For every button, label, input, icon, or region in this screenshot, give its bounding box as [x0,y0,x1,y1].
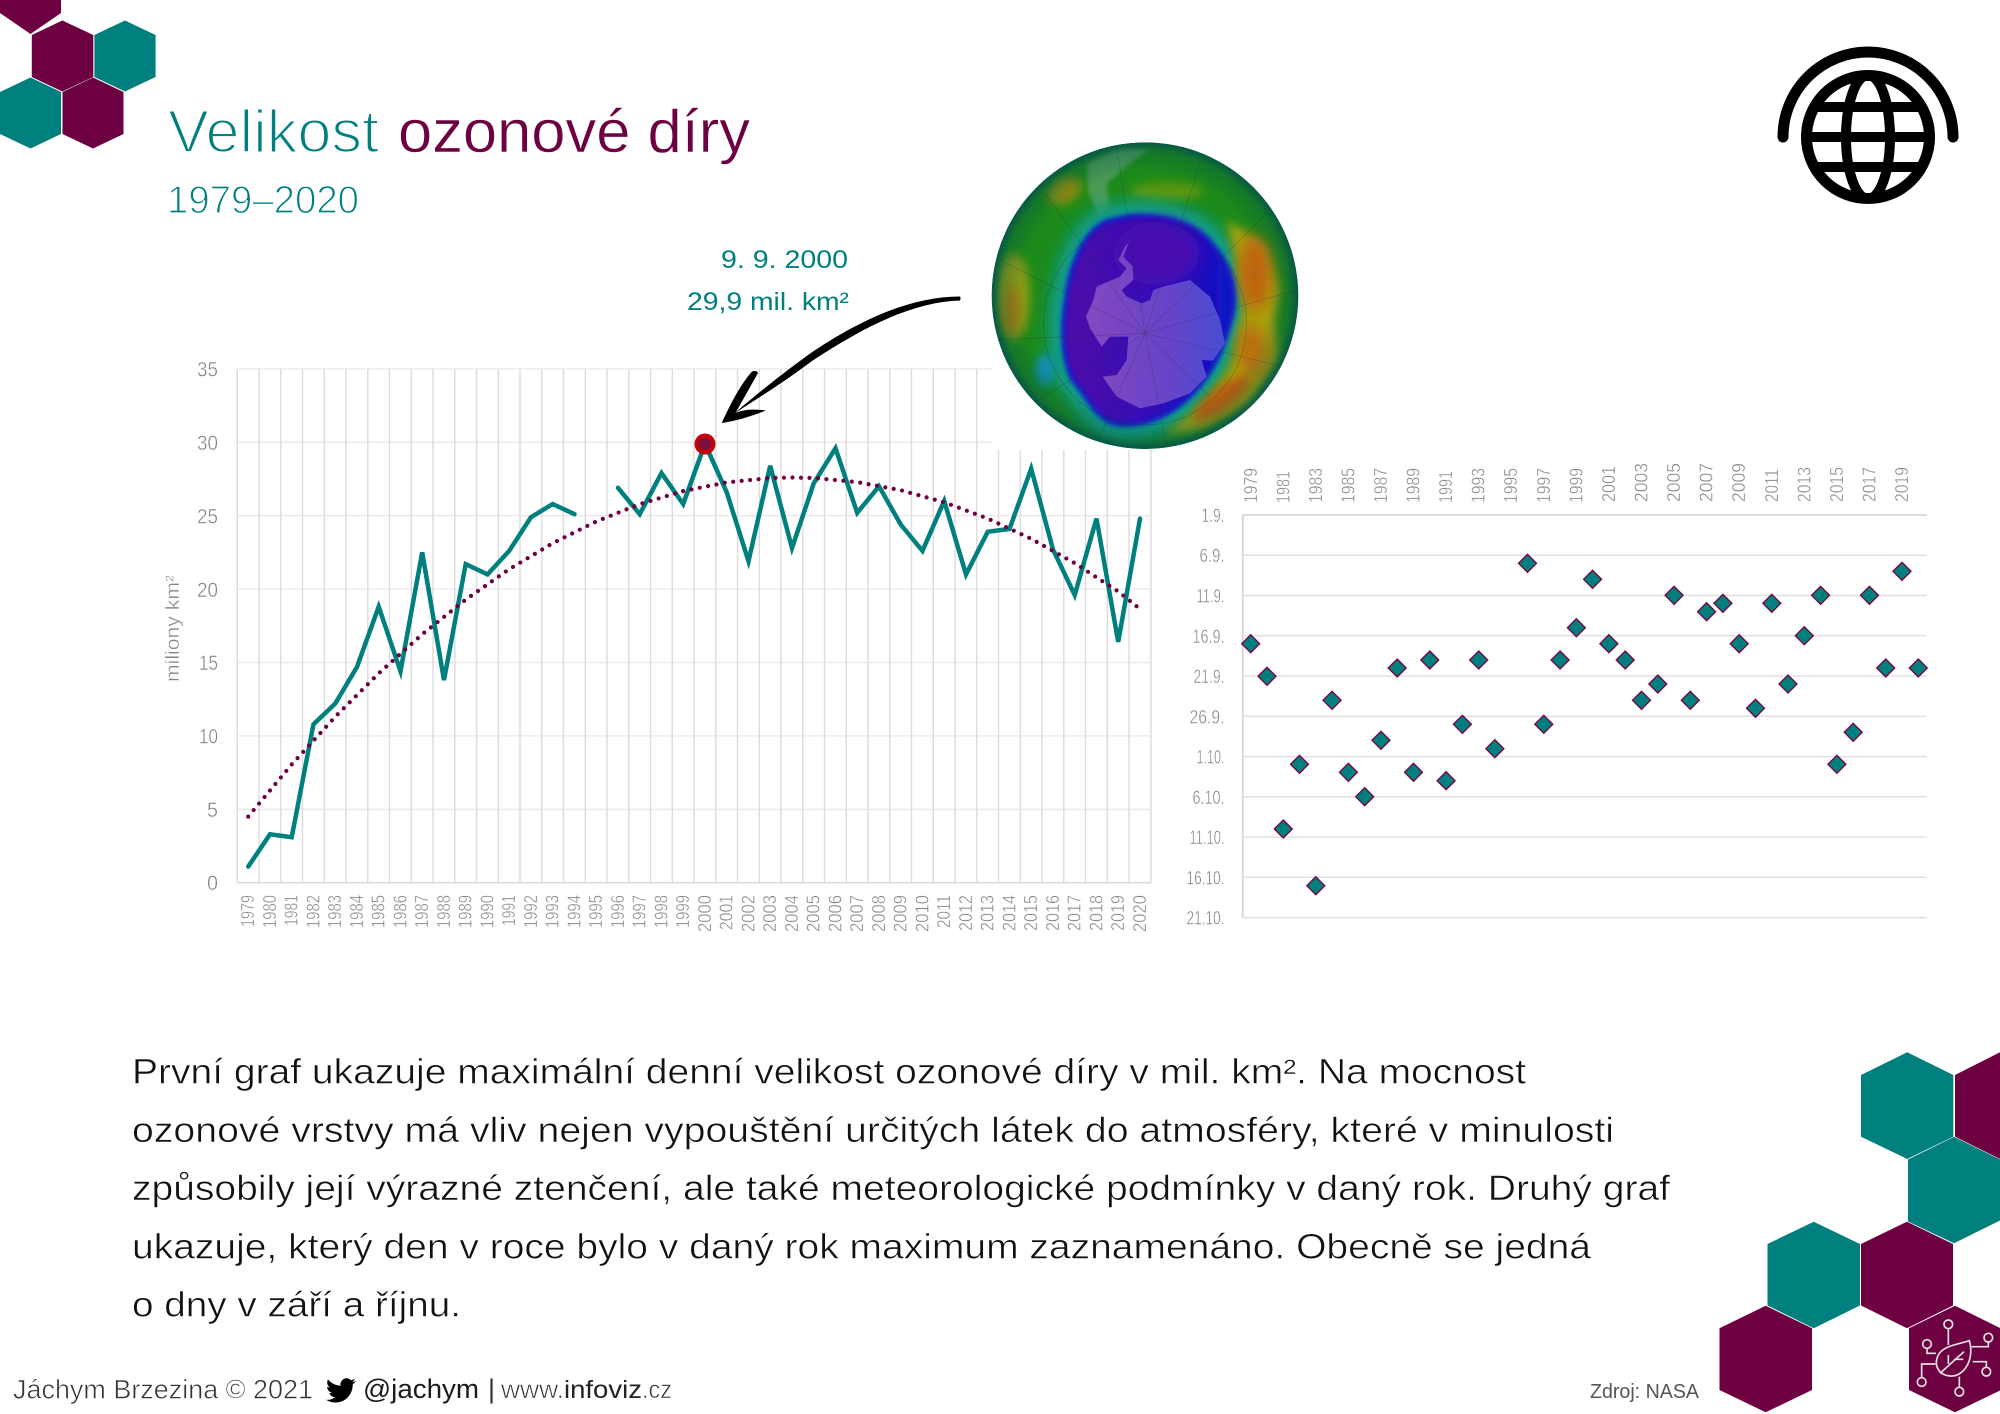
x axis year labels chart 2: 1989 [1404,468,1424,503]
x axis year labels chart 2: 1981 [1273,471,1293,503]
x axis year labels chart 2: 1995 [1501,468,1521,503]
x axis year labels chart 2 [1241,463,1912,503]
footer credit: Jáchym Brzezina © 2021 [13,1374,313,1404]
footer credit: infoviz [564,1376,642,1404]
hexagon cluster top left [0,0,156,148]
x axis year labels chart 1: 1999 [673,895,693,928]
y axis labels chart 1: 35 [197,358,218,382]
scatter chart: date of yearly maximum [1186,463,1927,930]
x axis year labels chart 2: 1999 [1566,468,1586,503]
x axis year labels chart 1: 2009 [891,895,911,932]
x axis year labels chart 1: 1996 [608,895,628,928]
grid lines chart 1 [237,369,1151,883]
globe icon top right [1783,52,1953,199]
x axis year labels chart 1: 2020 [1130,895,1150,932]
x axis year labels chart 1: 1979 [238,895,258,927]
explanatory paragraph: způsobily její výrazné ztenčení, ale také meteorologické podmínky v daný rok. Druhý graf [132,1169,1670,1208]
x axis year labels chart 2: 2013 [1794,467,1814,502]
y axis date labels: 6.10. [1192,788,1224,809]
x axis year labels chart 1: 2015 [1021,895,1041,931]
x axis year labels chart 1: 2007 [847,895,867,932]
x axis year labels chart 2: 1991 [1436,471,1456,503]
explanatory paragraph [132,1052,1670,1325]
x axis year labels chart 1: 2008 [869,895,889,932]
x axis year labels chart 1: 1991 [499,895,519,926]
y axis labels chart 1: 25 [197,506,218,528]
hexagon cluster bottom right [1720,1052,2000,1412]
x axis year labels chart 1: 2019 [1108,895,1128,931]
ozone hole globe image [992,142,1298,449]
x axis year labels chart 1: 1987 [412,895,432,928]
x axis year labels chart 1: 2006 [826,895,846,932]
x axis year labels chart 2: 2009 [1729,463,1749,502]
x axis year labels chart 1: 1981 [282,895,302,926]
title [168,98,750,165]
y axis labels chart 1: 30 [197,432,218,455]
y axis date labels: 16.9. [1192,627,1224,648]
x axis year labels chart 1: 2014 [1000,895,1020,931]
x axis year labels chart 2: 1983 [1306,468,1326,503]
teal data line [248,444,1140,867]
footer credit: www. [500,1376,564,1404]
x axis year labels chart 1: 1984 [347,895,367,928]
explanatory paragraph: ukazuje, který den v roce bylo v daný rok maximum zaznamenáno. Obecně se jedná [132,1227,1592,1266]
icon: leaf with circuit nodes [1917,1320,1993,1396]
callout: date and area of maximum: 9. 9. 2000 [721,246,848,274]
x axis year labels chart 1: 1983 [325,895,345,928]
y axis labels chart 1: 10 [199,726,218,748]
x axis year labels chart 1: 2010 [912,895,932,932]
x axis year labels chart 2: 2007 [1697,463,1717,502]
y axis labels chart 1: 20 [197,579,218,602]
title: Velikost [168,98,379,165]
y axis labels chart 1: 0 [207,872,218,895]
source note: Zdroj: NASA [1590,1381,1700,1403]
x axis year labels chart 2: 1985 [1338,468,1358,503]
x axis year labels chart 2: 1987 [1371,468,1391,503]
diamond markers [1242,554,1927,895]
Antarctica [1086,235,1225,408]
y axis date labels: 21.9. [1194,667,1224,688]
line chart: maximum daily ozone hole size [163,358,1151,932]
y axis date labels: 26.9. [1190,707,1224,728]
y axis labels chart 1 [197,358,218,895]
x axis year labels chart 1: 1998 [652,895,672,928]
explanatory paragraph: První graf ukazuje maximální denní velikost ozonové díry v mil. km². Na mocnost [132,1052,1526,1092]
x axis year labels chart 2: 1993 [1469,468,1489,503]
x axis year labels chart 1: 2017 [1065,895,1085,931]
icon: twitter bird [326,1378,356,1402]
x axis year labels chart 1: 2001 [717,895,737,930]
x axis year labels chart 1: 1997 [630,895,650,928]
x axis year labels chart 1: 2002 [738,895,758,932]
y axis date labels [1186,506,1224,930]
x axis year labels chart 1: 1989 [456,895,476,928]
arrow from globe to maximum [722,296,960,423]
x axis year labels chart 1: 2003 [760,895,780,932]
x axis year labels chart 1: 1980 [260,895,280,928]
cyan halo around hole [1064,216,1233,424]
y axis date labels: 1.9. [1202,506,1224,527]
x axis year labels chart 1: 1992 [521,895,541,928]
white image background behind globe [992,140,1302,450]
dotted trend line [248,478,1140,817]
y axis date labels: 6.9. [1200,546,1224,567]
x axis year labels chart 1: 2011 [934,895,954,928]
x axis year labels chart 2: 2019 [1892,467,1912,502]
x axis year labels chart 2: 2015 [1827,467,1847,502]
subtitle: 1979–2020 [167,179,359,222]
y axis date labels: 1.10. [1196,748,1224,769]
x axis year labels chart 2: 1997 [1534,468,1554,503]
y axis date labels: 11.10. [1190,828,1224,849]
x axis year labels chart 2: 1979 [1241,468,1261,503]
y axis labels chart 1: 15 [199,652,218,675]
y axis date labels: 11.9. [1196,586,1224,608]
x axis year labels chart 2: 2005 [1664,463,1684,502]
x axis year labels chart 2: 2011 [1762,469,1782,502]
meridians [993,147,1297,447]
highlighted maximum point 2000 [694,434,716,454]
x axis year labels chart 1 [238,895,1150,932]
x axis year labels chart 1: 2000 [695,895,715,932]
footer credit: @jachym [363,1374,479,1404]
footer credit: .cz [642,1376,672,1404]
y axis date labels: 16.10. [1186,868,1224,889]
explanatory paragraph: o dny v září a říjnu. [132,1286,461,1325]
x axis year labels chart 1: 2013 [978,895,998,931]
x axis year labels chart 1: 2016 [1043,895,1063,931]
x axis year labels chart 1: 2018 [1086,895,1106,931]
ozone ring right crescent [1163,220,1280,435]
footer credit [13,1374,672,1404]
x axis year labels chart 1: 1993 [543,895,563,928]
x axis year labels chart 1: 1994 [564,895,584,928]
blue and purple hole [1064,216,1233,424]
x axis year labels chart 1: 1985 [369,895,389,928]
x axis year labels chart 1: 1988 [434,895,454,928]
callout: date and area of maximum [687,246,849,316]
y axis title: miliony km² [163,575,184,682]
x axis year labels chart 1: 1990 [478,895,498,928]
title: ozonové díry [398,98,750,165]
x axis year labels chart 2: 2003 [1632,463,1652,502]
x axis year labels chart 1: 2012 [956,895,976,931]
callout: date and area of maximum: 29,9 mil. km² [687,288,849,316]
x axis year labels chart 1: 1982 [304,895,324,928]
y axis labels chart 1: 5 [207,799,218,822]
y axis date labels: 21.10. [1186,909,1224,930]
x axis year labels chart 2: 2001 [1599,466,1619,502]
grid lines chart 2 [1243,515,1927,918]
explanatory paragraph: ozonové vrstvy má vliv nejen vypouštění určitých látek do atmosféry, které v minulosti [132,1111,1614,1150]
x axis year labels chart 2: 2017 [1860,467,1880,502]
x axis year labels chart 1: 1995 [586,895,606,928]
x axis year labels chart 1: 2004 [782,895,802,932]
x axis year labels chart 1: 1986 [390,895,410,928]
footer credit: | [488,1374,495,1404]
x axis year labels chart 1: 2005 [804,895,824,932]
